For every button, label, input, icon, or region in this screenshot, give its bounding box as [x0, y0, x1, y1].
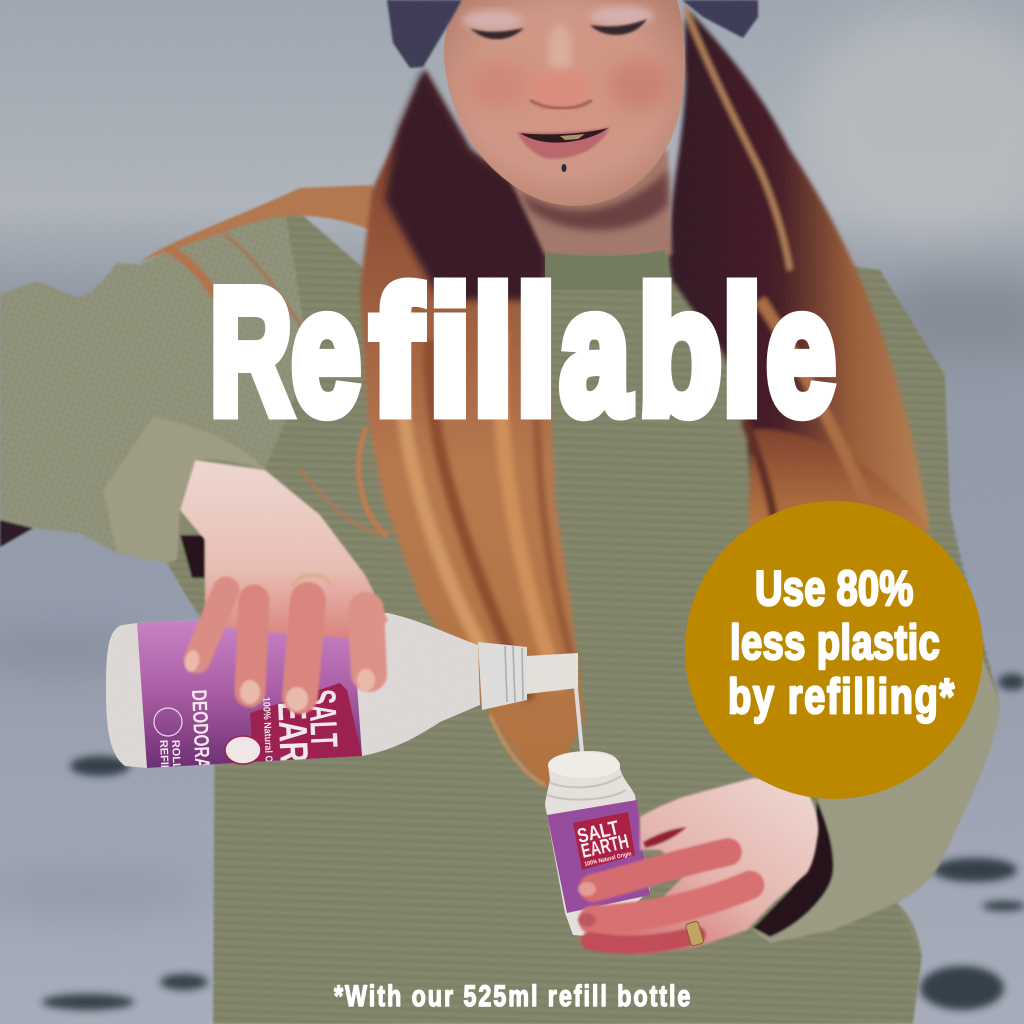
hair: central long locks — [360, 70, 585, 790]
small roll-on bottle — [545, 751, 650, 937]
title: l — [516, 252, 556, 451]
hair: long left strands over shoulder — [140, 185, 395, 535]
small bottle label — [547, 800, 650, 913]
title — [210, 252, 837, 451]
title: e — [291, 252, 361, 451]
ring on pouring hand — [292, 575, 331, 586]
fingernails — [183, 649, 375, 711]
eyes — [470, 28, 524, 39]
bottle label text: ROLL-ON — [169, 740, 183, 790]
mouth — [517, 127, 610, 159]
title: i — [429, 252, 471, 451]
wedding ring — [685, 921, 704, 946]
footnote: *With our 525ml refill bottle — [334, 979, 690, 1013]
left cuff — [103, 417, 265, 563]
large refill bottle — [106, 613, 584, 768]
small roll-on bottle: EARTH — [579, 831, 631, 863]
callout: plastic saving: by refilling* — [728, 670, 955, 724]
woman's face — [444, 0, 685, 206]
bottle opening — [548, 752, 620, 778]
label badge — [225, 736, 261, 764]
title: e — [766, 252, 836, 451]
sweater — [0, 198, 1000, 1024]
bottle label text: REFILLS — [157, 740, 171, 786]
left cuff opening — [180, 535, 205, 578]
right sleeve — [753, 600, 1000, 943]
neck and collar — [510, 150, 672, 290]
callout: plastic saving: Use 80% — [755, 562, 913, 616]
pouring hand — [180, 460, 388, 711]
right sleeve opening — [753, 800, 833, 937]
callout: plastic saving — [685, 501, 983, 799]
bottle label text: 100% Natural Origin — [260, 697, 275, 782]
bottle label text: EARTH — [269, 700, 317, 802]
title: a — [560, 252, 630, 451]
hair: right side — [669, 5, 930, 530]
bottle spout — [527, 653, 578, 694]
liquid stream — [576, 688, 582, 752]
small roll-on bottle: SALT — [575, 817, 621, 848]
title: R — [210, 252, 292, 451]
beanie hat — [387, 0, 758, 68]
title: f — [371, 252, 421, 451]
fingernails — [578, 882, 596, 896]
callout: plastic saving: less plastic — [730, 616, 940, 670]
title: l — [722, 252, 762, 451]
small roll-on bottle: 100% Natural Origin — [584, 851, 632, 868]
bottle label text — [160, 690, 338, 768]
bottle collar — [478, 642, 527, 710]
bottle label text: SALT — [300, 689, 344, 748]
title: b — [638, 252, 722, 451]
holding hand — [577, 778, 818, 955]
lip piercing — [562, 164, 566, 172]
x7 refills icon — [154, 708, 182, 736]
title: l — [473, 252, 513, 451]
bottle label text: DEODORANT — [187, 689, 214, 790]
